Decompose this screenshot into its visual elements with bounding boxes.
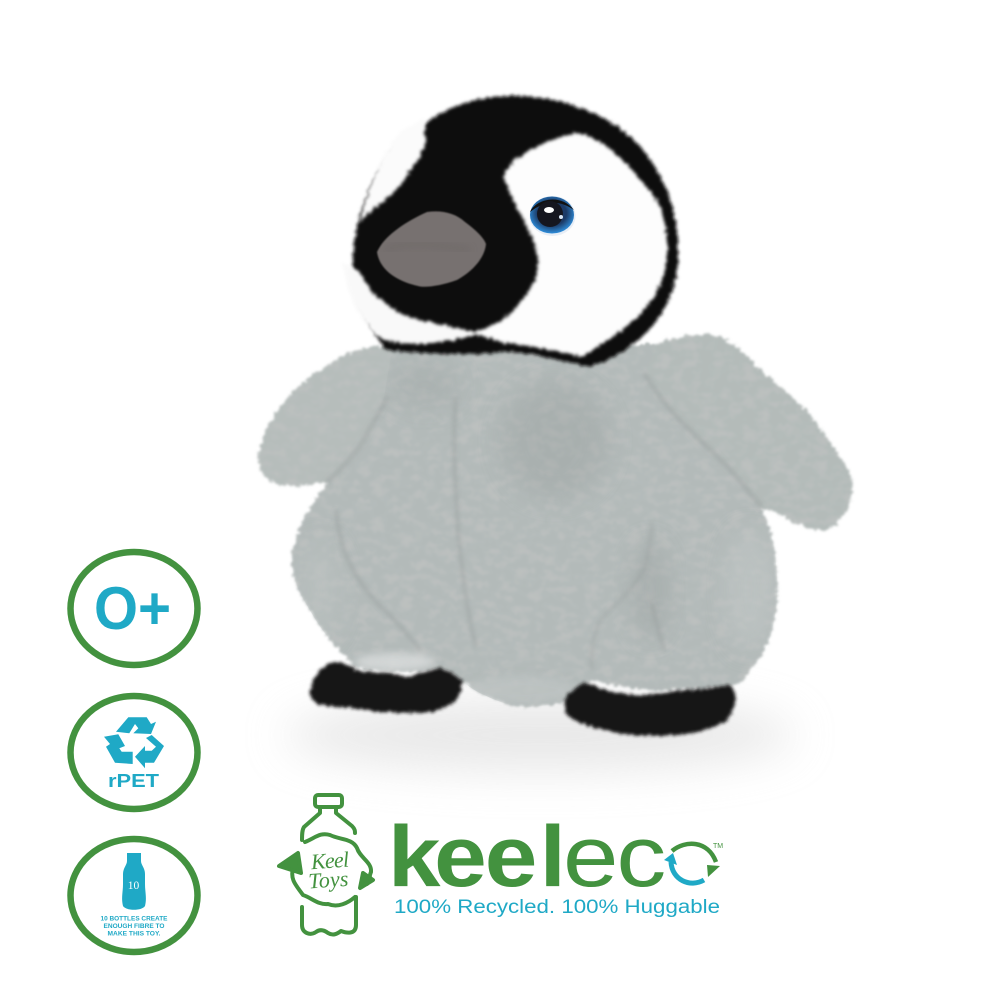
recycling loop left [292, 868, 355, 905]
ground shadow [285, 699, 795, 771]
Keel Toys wordmark: Keel [309, 847, 350, 874]
penguin plush toy [258, 96, 852, 771]
arrow head blue [664, 853, 677, 865]
bottle neck [302, 807, 355, 840]
ec: ec [563, 808, 666, 904]
badge: 10 bottles [70, 839, 198, 952]
white lower-left patch [342, 262, 478, 344]
badge: age 0+ [70, 552, 198, 665]
Keel Toys wordmark: Toys [307, 866, 349, 893]
age label: O+ [94, 575, 171, 642]
keel: keel [388, 809, 566, 905]
icon: recycling arrows [104, 717, 164, 768]
rPET label: rPET [108, 771, 159, 791]
right foot [564, 683, 736, 736]
bottles caption [100, 916, 168, 938]
flipper seams [326, 373, 762, 507]
bottle base [302, 897, 356, 934]
icon: bottle [122, 853, 146, 910]
body shading [298, 360, 775, 704]
arrow head left [279, 853, 301, 873]
letter o: green arrow [672, 844, 716, 862]
bottles caption: ENOUGH FIBRE TO [104, 923, 164, 930]
logo: Keel Toys bottle [279, 795, 373, 934]
white face patch [470, 133, 668, 357]
recycling loop right [305, 834, 371, 884]
white upper-left patch [360, 118, 425, 222]
beak [377, 211, 486, 287]
left flipper [258, 345, 410, 486]
Keel Toys wordmark [306, 847, 351, 893]
beak shading [385, 244, 470, 250]
body [292, 345, 777, 707]
eye [530, 196, 576, 236]
arrow head right [360, 873, 373, 888]
trademark: TM [713, 843, 723, 850]
left foot [310, 662, 462, 713]
head [353, 96, 678, 367]
tagline: 100% Recycled. 100% Huggable [394, 897, 720, 918]
bottles caption: 10 BOTTLES CREATE [100, 916, 168, 922]
logo: keeleco wordmark [388, 808, 723, 918]
infographic canvas [67, 92, 854, 956]
bottles caption: MAKE THIS TOY. [108, 930, 161, 938]
letter o: blue arrow [671, 862, 704, 883]
right flipper [630, 335, 852, 530]
bottle number: 10 [128, 880, 140, 892]
badge: rPET [70, 696, 198, 809]
bottle cap [315, 795, 342, 807]
arrow head green [707, 865, 720, 877]
